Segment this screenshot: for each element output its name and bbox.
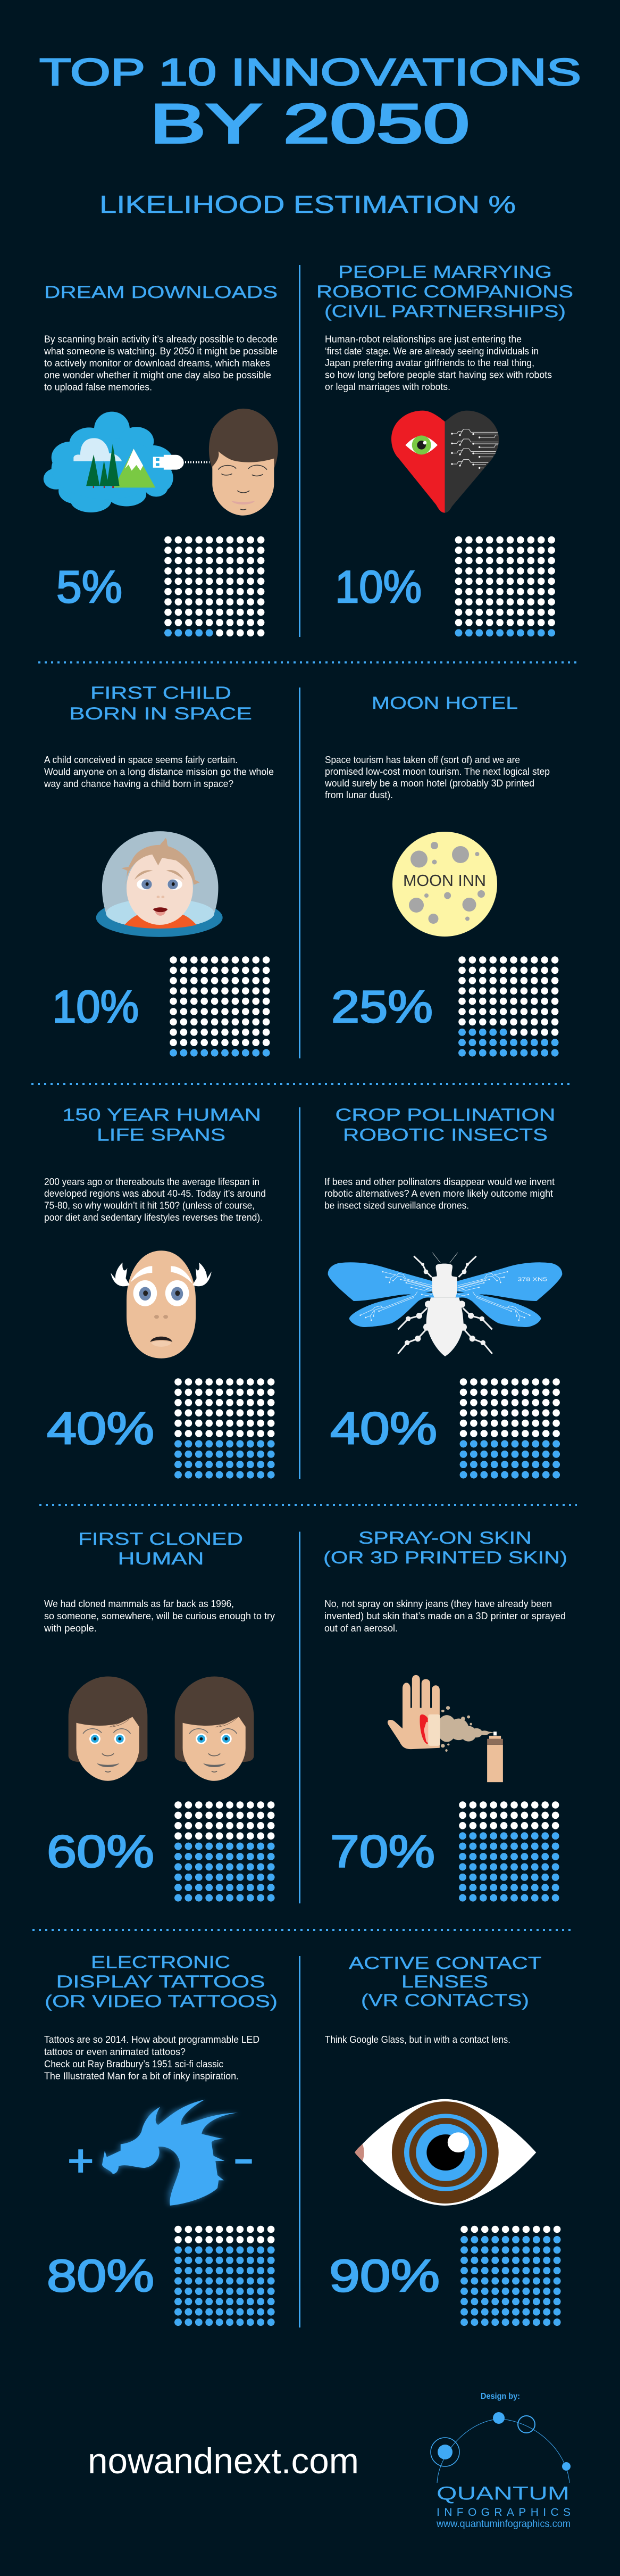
footer url: nowandnext.com <box>88 2441 359 2481</box>
title: BY 2050 <box>150 93 470 155</box>
icon: hand with spray can <box>388 1675 503 1782</box>
heading: spray-on skin <box>323 1528 567 1567</box>
text: marrying robots: Japan preferring avatar girlfriends to the real thing, <box>325 358 534 368</box>
heading: robotic insects: ROBOTIC INSECTS <box>343 1125 548 1144</box>
text: moon hotel: from lunar dust). <box>325 790 393 800</box>
heading: cloned human <box>78 1529 243 1568</box>
text: dream downloads: to actively monitor or download dreams, which makes <box>44 358 270 369</box>
text: robotic insects: If bees and other pollinators disappear would we invent <box>324 1177 555 1187</box>
text: moon hotel: would surely be a moon hotel (probably 3D printed <box>324 778 534 789</box>
panel: row 5 <box>44 1953 560 2327</box>
subtitle: LIKELIHOOD ESTIMATION % <box>99 190 516 218</box>
text: dream downloads: one wonder whether it might one day also be possible <box>44 370 271 380</box>
text: dream downloads <box>44 334 278 393</box>
text: robotic insects: robotic alternatives? A even more likely outcome might <box>324 1188 553 1199</box>
heading: marrying robots: (CIVIL PARTNERSHIPS) <box>324 302 566 321</box>
dot grid: 80 percent <box>174 2226 274 2326</box>
icon: moon inn <box>392 832 497 937</box>
heading: child in space: BORN IN SPACE <box>69 704 252 723</box>
heading: child in space <box>69 683 252 723</box>
heading: active contact lenses: ACTIVE CONTACT <box>349 1953 541 1973</box>
text: cloned human: with people. <box>44 1623 97 1634</box>
percent: 40: 40% <box>47 1404 154 1454</box>
text: child in space: A child conceived in space seems fairly certain. <box>44 755 238 765</box>
text: dream downloads: By scanning brain activity it’s already possible to decode <box>44 334 278 345</box>
heading: life spans: LIFE SPANS <box>97 1125 225 1144</box>
icon: baby in space helmet <box>96 831 223 937</box>
text: life spans: 75-80, so why wouldn’t it hit 150? (unless of course, <box>44 1200 255 1211</box>
dot grid: 40 percent <box>174 1378 274 1478</box>
designer logo <box>431 2392 571 2530</box>
text: video tattoos <box>44 2034 259 2082</box>
icon: moon inn: MOON INN <box>403 871 486 890</box>
heading: active contact lenses: LENSES <box>401 1972 488 1991</box>
text: moon hotel: promised low-cost moon tourism. The next logical step <box>325 766 550 777</box>
heading: video tattoos: (OR VIDEO TATTOOS) <box>45 1992 278 2011</box>
logo orbit mark <box>431 2412 571 2483</box>
icon: eye with contact lens <box>355 2099 536 2206</box>
text: dream downloads: to upload false memories. <box>44 382 152 393</box>
dot grid: 60 percent <box>174 1801 274 1901</box>
icon: dream cloud with USB and sleeping head <box>44 409 278 516</box>
icon: glowing dragon tattoo <box>69 2100 252 2206</box>
heading: robotic insects <box>335 1105 555 1144</box>
heading: cloned human: FIRST CLONED <box>78 1529 243 1548</box>
text: spray-on skin: out of an aerosol. <box>324 1623 398 1634</box>
text: robotic insects <box>324 1177 555 1211</box>
design credit: Design by: <box>481 2392 520 2401</box>
panel: row 3 <box>44 1105 562 1479</box>
percent: 80: 80% <box>47 2251 154 2301</box>
text: spray-on skin <box>324 1598 566 1634</box>
text: life spans <box>44 1177 266 1223</box>
panel: row 2 <box>44 683 558 1058</box>
text: video tattoos: Tattoos are so 2014. How about programmable LED <box>44 2034 259 2045</box>
text: video tattoos: Check out Ray Bradbury’s 1951 sci-fi classic <box>44 2059 223 2069</box>
panel: row 4 <box>44 1528 567 1903</box>
text: robotic insects: be insect sized surveillance drones. <box>324 1200 469 1211</box>
heading: dream downloads: DREAM DOWNLOADS <box>44 283 278 302</box>
text: marrying robots: or legal marriages with robots. <box>325 382 450 392</box>
percent: 5: 5% <box>56 562 122 612</box>
text: marrying robots: so how long before people start having sex with robots <box>325 369 552 380</box>
text: child in space: way and chance having a child born in space? <box>44 778 233 789</box>
text: cloned human: We had cloned mammals as far back as 1996, <box>44 1598 234 1609</box>
icon: two cloned heads <box>69 1676 254 1781</box>
text: active contact lenses: Think Google Glass, but in with a contact lens. <box>325 2034 510 2045</box>
heading: robotic insects: CROP POLLINATION <box>335 1105 555 1124</box>
heading: child in space: FIRST CHILD <box>90 683 231 702</box>
heading: video tattoos: DISPLAY TATTOOS <box>56 1972 265 1991</box>
heading: video tattoos <box>45 1953 278 2011</box>
dot grid: 90 percent <box>460 2226 560 2326</box>
heading: marrying robots: PEOPLE MARRYING <box>338 262 552 281</box>
logo tagline: INFOGRAPHICS <box>437 2506 571 2519</box>
icon: half human half robot heart <box>391 411 499 513</box>
heading: life spans <box>62 1105 261 1144</box>
text: dream downloads: what someone is watching. By 2050 it might be possible <box>44 346 278 357</box>
percent: 60: 60% <box>47 1827 154 1877</box>
text: moon hotel <box>324 755 550 800</box>
heading: spray-on skin: SPRAY-ON SKIN <box>358 1528 532 1547</box>
text: cloned human: so someone, somewhere, will be curious enough to try <box>44 1611 275 1621</box>
logo website: www.quantuminfographics.com <box>436 2519 571 2530</box>
text: cloned human <box>44 1598 275 1634</box>
heading: moon hotel: MOON HOTEL <box>372 693 518 713</box>
heading: marrying robots: ROBOTIC COMPANIONS <box>316 282 573 301</box>
text: child in space <box>44 755 274 789</box>
text: video tattoos: The Illustrated Man for a bit of inky inspiration. <box>44 2071 239 2082</box>
dot grid: 70 percent <box>459 1801 559 1901</box>
dot grid: 5 percent <box>164 536 264 636</box>
text: moon hotel: Space tourism has taken off (sort of) and we are <box>325 755 520 765</box>
icon: robotic insect <box>328 1253 562 1356</box>
heading: video tattoos: ELECTRONIC <box>91 1953 230 1972</box>
title <box>39 52 581 155</box>
text: marrying robots: ‘first date’ stage. We are already seeing individuals in <box>325 346 539 357</box>
text: spray-on skin: No, not spray on skinny jeans (they have already been <box>324 1598 552 1609</box>
dot grid: 25 percent <box>458 956 558 1056</box>
logo wordmark: QUANTUM <box>437 2483 569 2504</box>
percent: 10: 10% <box>335 562 422 612</box>
text: marrying robots: Human-robot relationships are just entering the <box>325 334 522 345</box>
text: life spans: 200 years ago or thereabouts the average lifespan in <box>44 1177 259 1187</box>
percent: 25: 25% <box>331 982 433 1032</box>
panel: row 1 <box>44 262 573 637</box>
icon: shocked old man <box>111 1250 212 1359</box>
heading: marrying robots <box>316 262 573 321</box>
text: life spans: developed regions was about 40-45. Today it’s around <box>44 1188 266 1199</box>
text: spray-on skin: invented) but skin that’s made on a 3D printer or sprayed <box>324 1611 566 1621</box>
dot grid: 10 percent <box>455 536 555 636</box>
percent: 10: 10% <box>52 982 139 1032</box>
icon: robotic insect: 378 XN5 <box>517 1277 548 1283</box>
heading: spray-on skin: (OR 3D PRINTED SKIN) <box>323 1548 567 1567</box>
percent: 40: 40% <box>330 1404 437 1454</box>
heading: active contact lenses <box>349 1953 541 2010</box>
percent: 90: 90% <box>329 2251 440 2301</box>
heading: life spans: 150 YEAR HUMAN <box>62 1105 261 1124</box>
text: marrying robots <box>325 334 552 392</box>
heading: active contact lenses: (VR CONTACTS) <box>361 1991 529 2010</box>
dot grid: 10 percent <box>170 956 270 1056</box>
dot grid: 40 percent <box>460 1378 560 1478</box>
text: child in space: Would anyone on a long distance mission go the whole <box>44 766 274 777</box>
text: life spans: poor diet and sedentary lifestyles reverses the trend). <box>44 1212 263 1223</box>
title: TOP 10 INNOVATIONS <box>39 52 581 94</box>
heading: cloned human: HUMAN <box>118 1549 204 1568</box>
percent: 70: 70% <box>330 1827 435 1877</box>
text: video tattoos: tattoos or even animated tattoos? <box>44 2047 186 2057</box>
